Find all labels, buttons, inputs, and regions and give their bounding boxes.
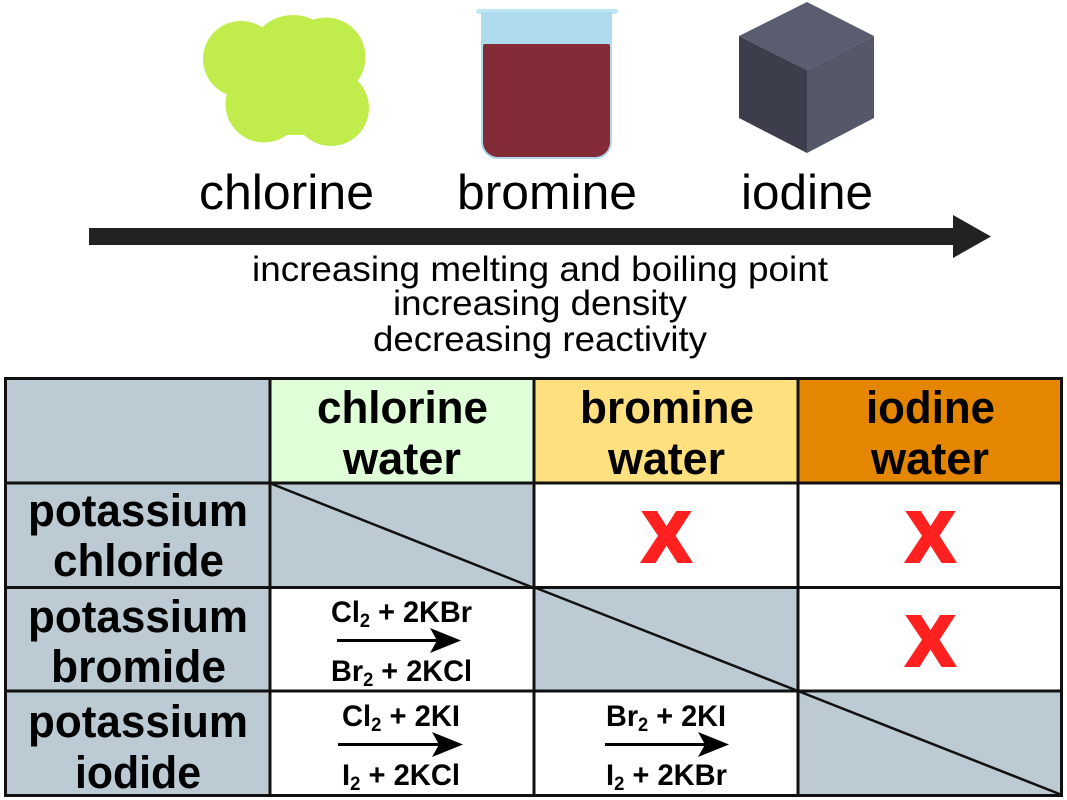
icon: beaker of bromine — [476, 9, 618, 159]
label: bromine: bromine — [457, 166, 637, 220]
reaction: chlorine and potassium bromide: 2 — [360, 611, 370, 632]
reaction: bromine and potassium iodide — [605, 700, 729, 795]
icon: iodine cube — [739, 2, 874, 153]
reaction: bromine and potassium iodide: 2 — [638, 715, 648, 736]
reaction: chlorine and potassium bromide: + 2KCl — [373, 655, 472, 688]
column header: iodine water: iodine — [866, 382, 995, 433]
reaction: chlorine and potassium iodide: + 2KCl — [360, 759, 460, 792]
reaction: bromine and potassium iodide: I — [606, 759, 614, 792]
reaction: chlorine and potassium iodide: 2 — [371, 715, 381, 736]
reaction: chlorine and potassium iodide — [338, 700, 463, 795]
column header: chlorine water: water — [342, 433, 461, 484]
reaction: chlorine and potassium bromide: + 2KBr — [370, 596, 472, 629]
trend text: increasing density — [393, 284, 688, 323]
table grid lines and diagonals — [5, 378, 1062, 796]
label: chlorine: chlorine — [199, 166, 374, 220]
table: halogen displacement reactions — [5, 378, 1062, 798]
column header: chlorine water — [317, 382, 488, 484]
reaction: chlorine and potassium bromide: 2 — [363, 670, 373, 691]
reaction: chlorine and potassium bromide — [331, 596, 472, 691]
reaction: chlorine and potassium bromide: Br — [331, 655, 364, 688]
row header: potassium bromide — [28, 591, 248, 692]
column header: bromine water: bromine — [580, 382, 754, 433]
no reaction: bromine water and potassium chloride: X — [643, 498, 690, 576]
reaction: bromine and potassium iodide: Br — [606, 700, 639, 733]
no reaction: iodine water and potassium chloride: X — [907, 498, 954, 576]
row header: potassium bromide: bromide — [51, 641, 226, 692]
row header: potassium iodide: potassium — [28, 696, 248, 747]
row header: potassium chloride — [28, 485, 248, 586]
row header: potassium bromide: potassium — [28, 591, 248, 642]
column header: chlorine water: chlorine — [317, 382, 488, 433]
reaction: chlorine and potassium iodide: I — [342, 759, 350, 792]
reaction: bromine and potassium iodide: + 2KI — [648, 700, 726, 733]
column header: iodine water — [866, 382, 995, 484]
row header: potassium iodide: iodide — [75, 747, 201, 798]
icon: chlorine gas cloud — [203, 15, 369, 146]
reaction: bromine and potassium iodide: 2 — [614, 774, 624, 795]
row header: potassium chloride: potassium — [28, 485, 248, 536]
row header: potassium chloride: chloride — [53, 535, 224, 586]
trend text — [252, 250, 828, 359]
table cell backgrounds — [5, 378, 1062, 796]
label: iodine: iodine — [741, 166, 873, 220]
column header: bromine water: water — [607, 433, 725, 484]
no reaction: iodine water and potassium bromide: X — [907, 602, 954, 680]
trend text: increasing melting and boiling point — [252, 250, 828, 289]
reaction: bromine and potassium iodide: + 2KBr — [624, 759, 727, 792]
trend text: decreasing reactivity — [373, 320, 708, 359]
arrow: trend direction — [89, 215, 991, 258]
reaction: chlorine and potassium iodide: Cl — [342, 700, 372, 733]
reaction: chlorine and potassium iodide: + 2KI — [381, 700, 460, 733]
row header: potassium iodide — [28, 696, 248, 798]
reaction: chlorine and potassium bromide: Cl — [331, 596, 361, 629]
column header: iodine water: water — [870, 433, 989, 484]
column header: bromine water — [580, 382, 754, 484]
reaction: chlorine and potassium iodide: 2 — [350, 774, 360, 795]
